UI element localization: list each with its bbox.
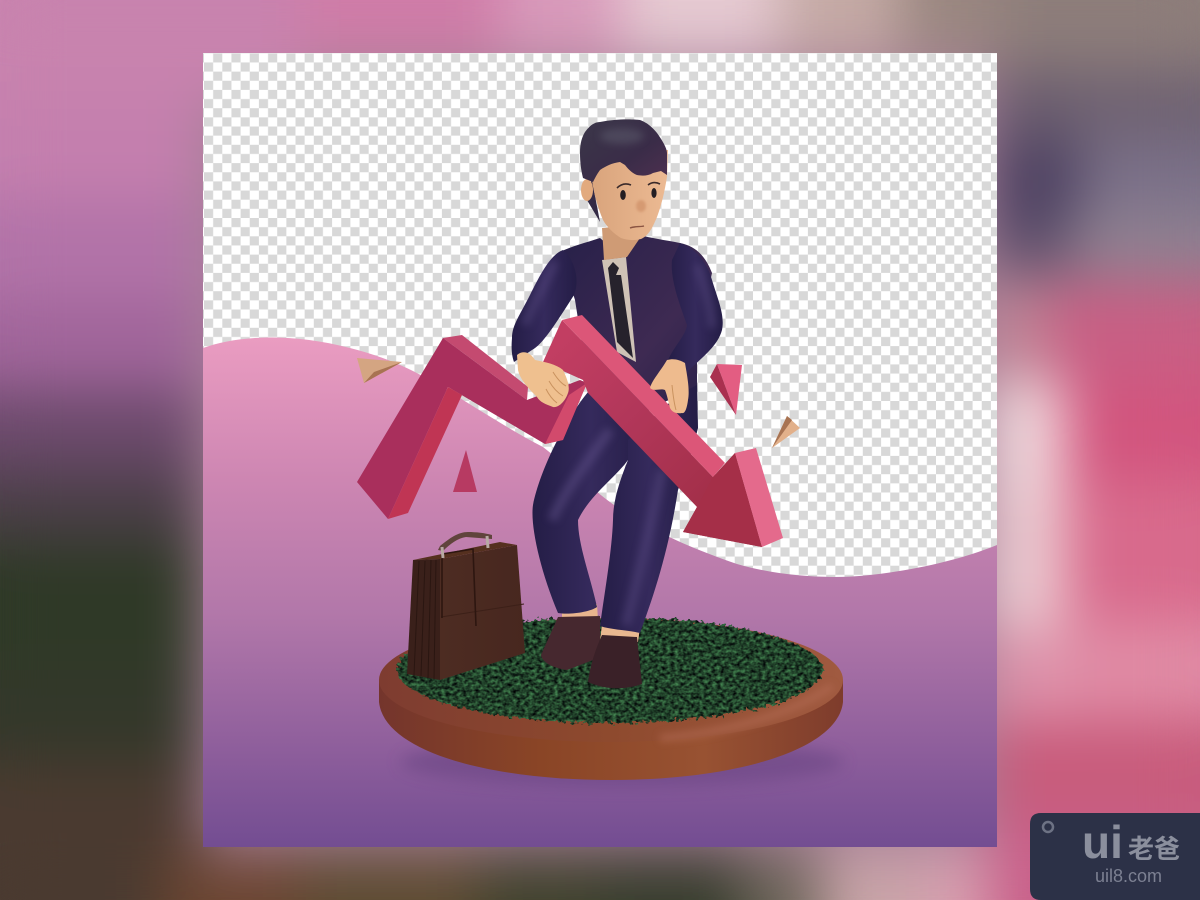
legs [532, 378, 698, 688]
hair front [580, 119, 667, 182]
upper stroke top face [443, 335, 528, 400]
ankles [562, 604, 598, 620]
left stroke front face [357, 338, 587, 519]
finger lines [672, 385, 676, 410]
illustration: businessman with falling arrow on grass base [357, 119, 844, 786]
trouser highlights [552, 430, 610, 520]
shadow under base [400, 738, 844, 786]
left trouser [532, 392, 650, 614]
left arm [512, 250, 577, 362]
falling arrow [357, 315, 783, 547]
right eyebrow [648, 183, 660, 185]
valley side face [545, 383, 587, 444]
main stroke light face [562, 315, 725, 477]
right eye [651, 188, 657, 198]
panel: transparent checker backdrop [203, 53, 997, 847]
wave: pink to purple gradient ground [203, 337, 997, 847]
fragment: tan shard left [357, 358, 402, 383]
briefcase [407, 532, 525, 680]
fragment: crimson triangle [453, 450, 477, 492]
left hand [517, 352, 569, 407]
arrow head light face [735, 448, 783, 547]
logo chinese text: 老爸 [1128, 834, 1180, 864]
round clay base [379, 618, 843, 780]
neck [602, 225, 640, 260]
finger lines [546, 372, 566, 403]
right arm [668, 243, 723, 372]
head [580, 119, 668, 240]
mouth [630, 226, 644, 228]
shirt [602, 257, 636, 362]
ear [581, 179, 593, 201]
grass disc [397, 617, 823, 723]
tie [608, 262, 633, 358]
logo text: ui [1082, 816, 1123, 868]
hair highlight [600, 128, 644, 144]
left eye [620, 190, 626, 200]
left shoe [541, 616, 600, 670]
hair back [584, 180, 600, 222]
torso and jacket [560, 235, 712, 415]
left eyebrow [617, 184, 631, 188]
watermark badge [1030, 813, 1200, 900]
tail side face [388, 387, 462, 519]
face [592, 150, 668, 240]
right shoe [588, 635, 642, 688]
arm highlights [525, 262, 712, 328]
badge hole [1043, 822, 1053, 832]
right hand [650, 359, 689, 413]
right trouser [600, 378, 698, 633]
nose [636, 200, 646, 212]
fragment: tan shard far right [772, 416, 800, 448]
main stroke dark face [543, 320, 762, 547]
fragment: pink shard right [710, 364, 742, 415]
arrow head dark face [683, 453, 762, 547]
site url: uil8.com [1095, 866, 1162, 886]
